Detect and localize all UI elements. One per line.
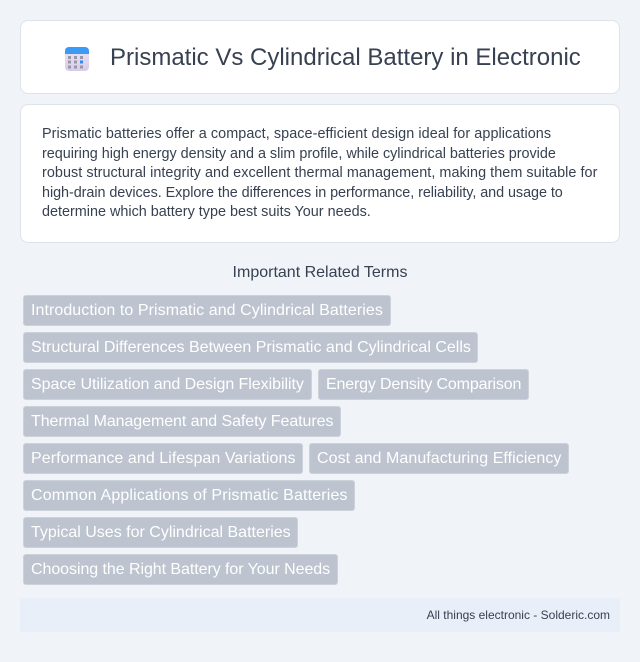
tag: Cost and Manufacturing Efficiency [317,450,561,467]
icon: calendar-style battery grid [65,47,89,71]
intro paragraph: requiring high energy density and a slim profile, while cylindrical batteries provide [42,146,556,162]
tag: Thermal Management and Safety Features [31,413,333,430]
title: Prismatic Vs Cylindrical Battery in Electronic [110,44,581,71]
tag [309,443,569,474]
tag: Common Applications of Prismatic Batteries [31,487,348,504]
tag: Structural Differences Between Prismatic and Cylindrical Cells [31,339,471,356]
tag: Choosing the Right Battery for Your Needs [31,561,330,578]
tag [23,369,312,400]
tag [23,295,391,326]
tag: Performance and Lifespan Variations [31,450,296,467]
intro paragraph [42,126,598,220]
tag: Introduction to Prismatic and Cylindrical Batteries [31,302,383,319]
footer credit: All things electronic - Solderic.com [427,608,610,622]
intro paragraph: determine which battery type best suits Your needs. [42,204,371,220]
tag list [23,295,569,585]
intro paragraph: robust structural integrity and excellent thermal management, making them suitable for [42,165,597,181]
tag [23,517,298,548]
intro text panel [20,104,620,243]
tag [23,406,341,437]
tag [23,480,355,511]
tag [23,443,303,474]
footer bar [20,598,620,632]
tag: Energy Density Comparison [326,376,521,393]
header panel [20,20,620,94]
intro paragraph: high-drain devices. Explore the differences in performance, reliability, and usage to [42,184,563,200]
tag [23,554,338,585]
intro paragraph: Prismatic batteries offer a compact, space-efficient design ideal for applications [42,126,551,142]
section heading: Important Related Terms [233,264,407,281]
tag: Typical Uses for Cylindrical Batteries [31,524,291,541]
tag [318,369,529,400]
tag: Space Utilization and Design Flexibility [31,376,304,393]
tag [23,332,478,363]
